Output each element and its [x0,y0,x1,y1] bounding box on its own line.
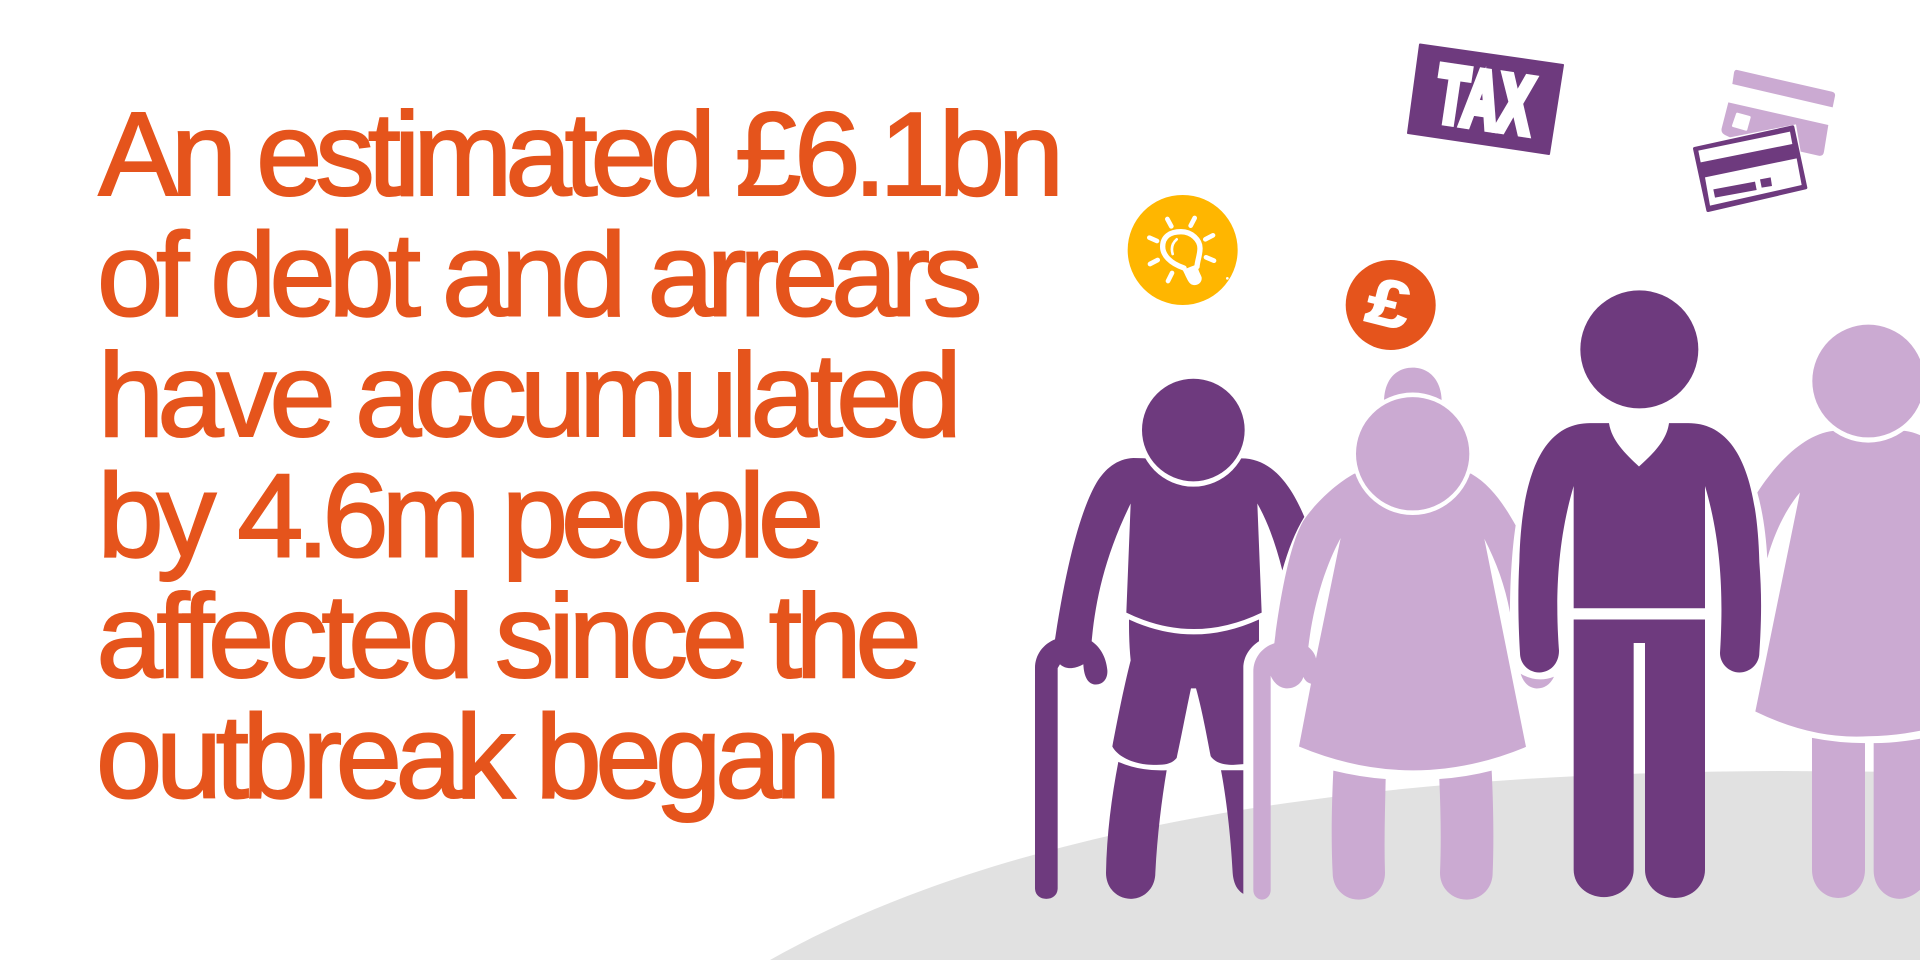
hand of woman behind [1521,674,1554,688]
head outline [1808,319,1920,443]
head [1580,290,1698,408]
dress, arms and cane [1253,474,1526,900]
gap between arm and dress [1308,538,1341,659]
trousers [1574,620,1705,898]
left leg [1812,738,1865,898]
icon: light bulb in yellow circle [1128,195,1238,305]
icon: bank cards [1695,70,1835,210]
icon: pound in orange circle [1346,260,1436,350]
icon: tax sign [1408,44,1563,154]
figure: older man with cane [1035,373,1304,899]
back card [1721,70,1835,156]
right leg [1874,738,1920,899]
headline line 5: affected since the [96,570,917,703]
head [1142,379,1245,481]
headline line 3: have accumulated [98,329,955,462]
headline [96,88,1057,824]
headline line 2: of debt and arrears [97,208,979,342]
torso, arms and cane [1035,458,1304,899]
shorts [1112,619,1259,765]
left leg [1332,771,1386,900]
icon: tax sign: TAX [1431,50,1538,152]
figure: woman at right edge [1755,319,1920,899]
headline line 6: outbreak began [96,690,835,824]
torso and arms [1518,423,1761,672]
headline line 1: An estimated £6.1bn [98,88,1057,221]
hair bun [1384,368,1442,402]
icon: pound in orange circle: £ [1359,263,1418,345]
head outline [1138,373,1249,487]
left leg [1106,762,1167,899]
dress [1755,431,1920,737]
head [1356,397,1469,510]
right leg [1439,771,1493,900]
grey ground curve [770,771,1920,960]
figure: older woman with cane [1253,368,1526,900]
head [1812,325,1920,437]
front card [1695,127,1806,210]
right leg [1221,770,1243,894]
figure: standing man [1518,290,1761,898]
headline line 4: by 4.6m people [98,450,819,582]
head outline [1352,393,1473,515]
